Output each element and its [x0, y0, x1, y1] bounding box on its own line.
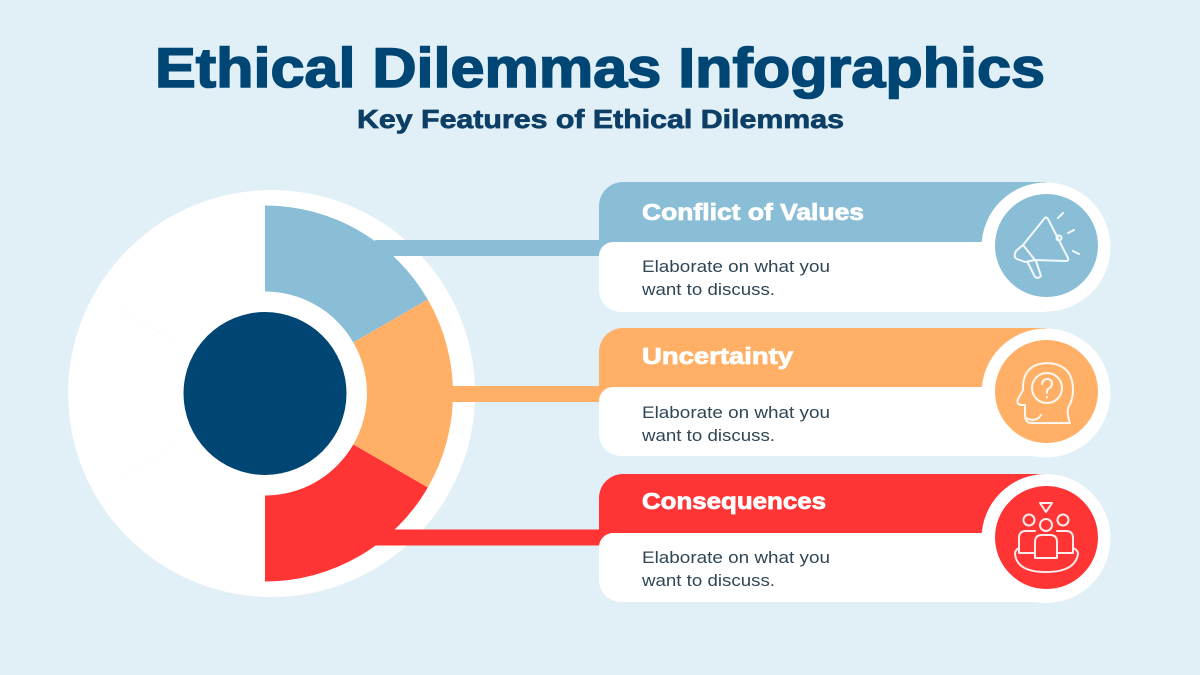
connector: conflict of values — [375, 240, 610, 256]
card heading: Conflict of Values — [642, 199, 864, 225]
panel: consequences — [599, 474, 1110, 603]
panel: conflict of values — [599, 182, 1110, 312]
segment: consequences — [265, 444, 428, 582]
connector: uncertainty — [452, 386, 610, 402]
card body — [599, 533, 1046, 602]
card header — [599, 182, 1046, 243]
card header — [599, 328, 1046, 388]
segment: conflict of values — [265, 206, 428, 342]
card text: Elaborate on what you — [642, 549, 830, 567]
card heading: Uncertainty — [642, 343, 793, 369]
connector: consequences — [375, 530, 610, 546]
icon: group of people — [982, 474, 1110, 603]
donut chart — [68, 190, 475, 597]
segment: uncertainty — [353, 300, 453, 488]
subtitle: Key Features of Ethical Dilemmas — [357, 104, 844, 134]
panel: uncertainty — [599, 328, 1110, 458]
icon: megaphone — [982, 182, 1110, 312]
card header — [599, 474, 1046, 533]
white backing circle — [68, 190, 475, 597]
card text: Elaborate on what you — [642, 258, 830, 276]
title: Ethical Dilemmas Infographics — [155, 36, 1045, 99]
card text: Elaborate on what you — [642, 404, 830, 422]
icon: head with question mark — [982, 328, 1110, 458]
card text: want to discuss. — [641, 572, 775, 590]
card text: want to discuss. — [641, 427, 775, 445]
card text: want to discuss. — [641, 281, 775, 299]
center circle — [184, 312, 346, 475]
card heading: Consequences — [642, 488, 826, 514]
card body — [599, 242, 1046, 312]
card body — [599, 387, 1046, 456]
